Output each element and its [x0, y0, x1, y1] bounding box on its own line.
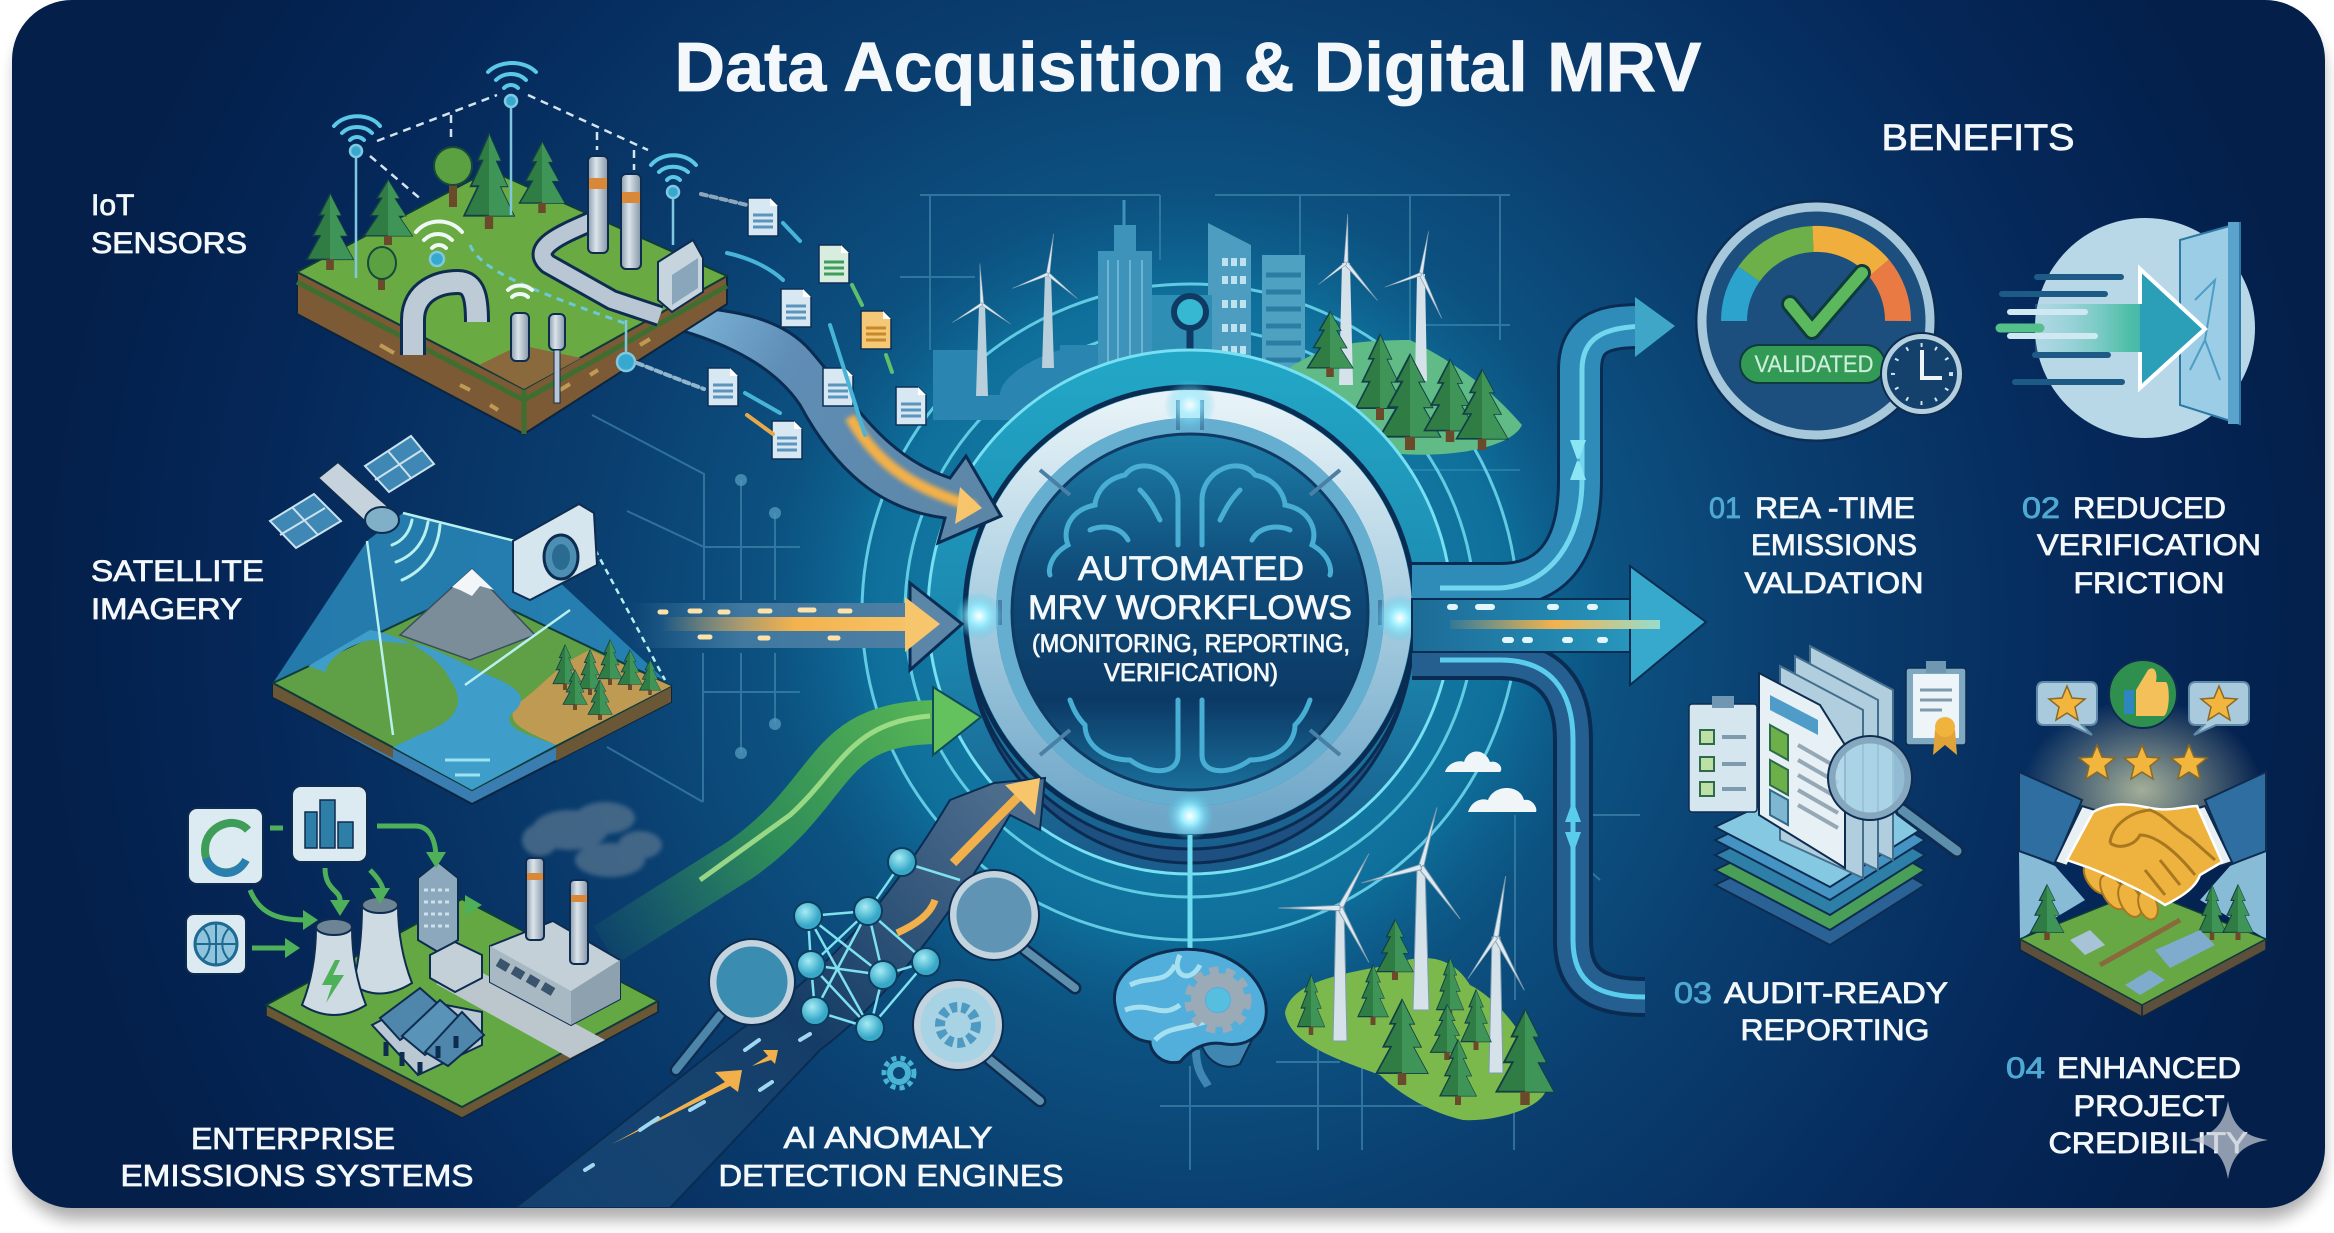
wind turbine 1: [952, 263, 1012, 396]
island: [2020, 939, 2266, 1017]
enterprise emissions systems label: [120, 1121, 473, 1193]
right flow: main arrow: [1412, 566, 1706, 685]
imaging beam: [273, 513, 665, 683]
wind turbine 2: [1012, 234, 1079, 368]
ground slab: [266, 1001, 658, 1118]
card: globe: [186, 914, 246, 974]
right sleeve: [2192, 772, 2266, 866]
icon: enterprise industrial site: [186, 786, 662, 1118]
IoT sensors label: [91, 189, 247, 260]
benefit 04 text: [2006, 1052, 2248, 1160]
island trees back: [1298, 920, 1464, 1035]
orange document: [861, 311, 891, 349]
benefit 02 text: REDUCED: [2073, 492, 2226, 525]
enterprise emissions systems label: EMISSIONS SYSTEMS: [120, 1158, 473, 1193]
office tower: [418, 862, 458, 952]
icon: AI neural network: [676, 848, 1075, 1101]
arrow shaft: [2035, 304, 2143, 352]
network edges: [808, 862, 960, 1028]
magnifier: [1828, 736, 1957, 851]
speech bubble left: [2037, 682, 2097, 735]
wind farm island: [1278, 807, 1554, 1120]
stacked back pages: [1780, 646, 1893, 878]
teal outer band: [947, 369, 1433, 855]
green document: [819, 245, 849, 283]
benefit 03 text: AUDIT-READY: [1724, 977, 1948, 1010]
benefit 02 friction arrow icon: [2000, 218, 2255, 438]
beam signal arcs: [392, 520, 440, 580]
brain gear: [1189, 971, 1247, 1029]
validated badge: [1740, 345, 1885, 383]
benefit 04 credibility icon: [2019, 660, 2266, 1017]
right flow: upper branch to benefit 1: [1412, 297, 1675, 588]
hub heading: AUTOMATED: [1078, 550, 1304, 588]
AI anomaly detection label: DETECTION ENGINES: [718, 1158, 1064, 1193]
road: [436, 966, 605, 1058]
island trees front: [1376, 990, 1554, 1105]
network nodes: [794, 848, 940, 1042]
skyscraper left: [1098, 200, 1152, 421]
enterprise emissions systems label: ENTERPRISE: [191, 1121, 395, 1156]
broken wall: [2180, 222, 2240, 424]
title: Data Acquisition & Digital MRV: [674, 28, 1702, 106]
benefit 03 text: 03: [1674, 977, 1712, 1010]
wind turbine 4: [1384, 231, 1444, 381]
satellite imagery label: SATELLITE: [91, 555, 264, 588]
sky panels: [2019, 851, 2266, 939]
right pipeline: [543, 222, 660, 316]
benefit 01 text: 01: [1709, 492, 1741, 525]
soil specks: [380, 339, 650, 410]
green flow arrowheads: [285, 852, 482, 958]
magnifier gear: [913, 980, 1040, 1101]
faint radial rings: [862, 284, 1518, 940]
wind turbine 3: [1317, 214, 1379, 385]
ground sensors: [511, 313, 565, 403]
benefit 01 text: VALDATION: [1744, 567, 1924, 600]
arrow: enterprise data flow: [605, 687, 981, 945]
central hub: automated MRV workflows: MRV WORKFLOWS: [1028, 589, 1352, 627]
benefit 02 text: FRICTION: [2074, 567, 2224, 600]
IoT sensors label: SENSORS: [91, 227, 247, 260]
benefit 03 text: [1674, 977, 1948, 1047]
terrain map: [273, 590, 671, 790]
forest trees: [1308, 312, 1508, 450]
map forest: [553, 640, 660, 720]
saw-tooth sheds: [372, 988, 484, 1075]
icon: satellite map scene: [270, 436, 671, 804]
fingers: [2078, 858, 2162, 922]
central hub: automated MRV workflows: [928, 296, 1452, 874]
speed lines: [2000, 277, 2122, 382]
gauge arcs: [1734, 239, 1898, 321]
small flow arrows: [637, 194, 892, 435]
document icons: [708, 198, 926, 459]
AI anomaly detection label: AI ANOMALY: [784, 1120, 992, 1155]
benefit 01 gauge icon: [1696, 201, 1963, 441]
hub glow nodes: [955, 379, 1424, 840]
control cabinet: [658, 240, 703, 312]
left bent pipe: [413, 282, 477, 355]
left clipboard: [1689, 696, 1757, 812]
benefits heading: BENEFITS: [1882, 117, 2074, 158]
handshake: [2067, 804, 2222, 922]
green hill: [1279, 340, 1522, 455]
palms: [2067, 804, 2222, 905]
green flow arrows: [250, 826, 436, 948]
benefit 04 text: PROJECT: [2074, 1090, 2224, 1123]
small annex: [430, 942, 482, 992]
thumb outline: [2110, 810, 2215, 895]
trees: [307, 134, 564, 290]
sand area: [512, 650, 671, 745]
clouds: [1445, 752, 1536, 812]
gauge face: [1702, 207, 1930, 435]
benefit 04 text: CREDIBILITY: [2048, 1127, 2248, 1160]
skyscraper centre: [1152, 223, 1251, 410]
soil block: [297, 272, 727, 434]
brain outline top: [1049, 466, 1331, 575]
wifi signals: [334, 63, 696, 180]
satellite: [270, 436, 434, 548]
clock: [1881, 333, 1963, 415]
magnifier left: [676, 939, 795, 1070]
turbine centre: [1361, 807, 1462, 1010]
ring lower thickness: [966, 625, 1414, 863]
arrow: IoT data flow: [684, 309, 1004, 546]
benefit 04 text: 04: [2006, 1052, 2045, 1085]
report layers: [1715, 772, 1925, 945]
turbine right: [1466, 876, 1527, 1073]
left sleeve: [2019, 772, 2095, 866]
card: city chart: [292, 786, 367, 862]
dashed network links: [370, 95, 648, 201]
magnifier upper: [949, 870, 1075, 988]
chimneys: [588, 156, 641, 269]
right flow: lower branch to benefit 3: [1412, 660, 1645, 997]
turbine left: [1278, 852, 1371, 1041]
skyline and wind farm behind hub: [933, 200, 1522, 455]
hub subheading: (MONITORING, REPORTING,: [1032, 630, 1350, 658]
benefit 03 audit report icon: [1689, 646, 1966, 945]
data documents stream: [637, 194, 926, 459]
hub stem and pin: [1174, 296, 1206, 397]
check mark: [1790, 273, 1862, 331]
satellite imagery label: [91, 555, 264, 626]
benefit 01 text: REA -TIME: [1755, 492, 1915, 525]
smoke: [522, 802, 662, 877]
benefit 02 text: 02: [2022, 492, 2060, 525]
benefit 01 text: EMISSIONS: [1751, 529, 1917, 562]
front page: [1759, 673, 1845, 868]
benefit 02 text: [2022, 492, 2261, 600]
benefit 04 text: ENHANCED: [2057, 1052, 2241, 1085]
island details: [2070, 920, 2215, 995]
arrow: AI anomaly data flow: [515, 778, 1045, 1208]
river and lake: [308, 630, 556, 790]
background city silhouettes: [933, 345, 1098, 420]
satellite imagery label: IMAGERY: [91, 593, 242, 626]
grass top: [297, 170, 727, 389]
cerebellum: [1200, 1036, 1252, 1067]
benefit 02 text: VERIFICATION: [2037, 529, 2261, 562]
factory main block: [490, 921, 620, 1025]
card: carbon cycle: [188, 808, 263, 884]
arrow head: [2140, 269, 2205, 388]
benefit 01 text: [1709, 492, 1924, 600]
white wifi on field: [416, 222, 532, 297]
circuit pins: [735, 474, 781, 759]
cooling towers: [302, 897, 412, 1015]
AI anomaly detection label: [718, 1120, 1064, 1193]
sparkle watermark: [2188, 1101, 2268, 1179]
validated badge: VALIDATED: [1754, 351, 1874, 378]
speech bubble right: [2189, 682, 2249, 735]
benefit 03 text: REPORTING: [1740, 1014, 1930, 1047]
central halo: [826, 247, 1554, 970]
AI brain and connector: [1114, 835, 1266, 1086]
beam lines: [367, 513, 665, 735]
brain stem: [1196, 1050, 1208, 1086]
IoT sensors label: IoT: [91, 189, 134, 222]
thumbs up badge: [2109, 660, 2177, 728]
small gear: [884, 1058, 914, 1088]
camera: [513, 504, 597, 600]
warm glow: [2022, 700, 2262, 880]
mountain: [400, 569, 535, 660]
island trees: [2030, 885, 2253, 940]
terrain edge: [273, 683, 671, 804]
background circuit grid: [592, 195, 1640, 1170]
central hub: automated MRV workflows: VERIFICATION): [1104, 659, 1278, 687]
skyscraper right: [1262, 255, 1305, 405]
factory chimneys: [526, 858, 588, 964]
icon: IoT island: [297, 63, 727, 434]
brain outline bottom: [1070, 700, 1310, 771]
island ground: [1285, 958, 1547, 1120]
sensor poles: [350, 95, 679, 371]
three stars: [2079, 745, 2207, 779]
arrow: satellite data flow: [630, 583, 962, 670]
certificate: [1906, 661, 1966, 755]
brain body: [1114, 949, 1266, 1063]
lightning icon: [322, 960, 344, 1003]
silver ring: [982, 404, 1398, 820]
